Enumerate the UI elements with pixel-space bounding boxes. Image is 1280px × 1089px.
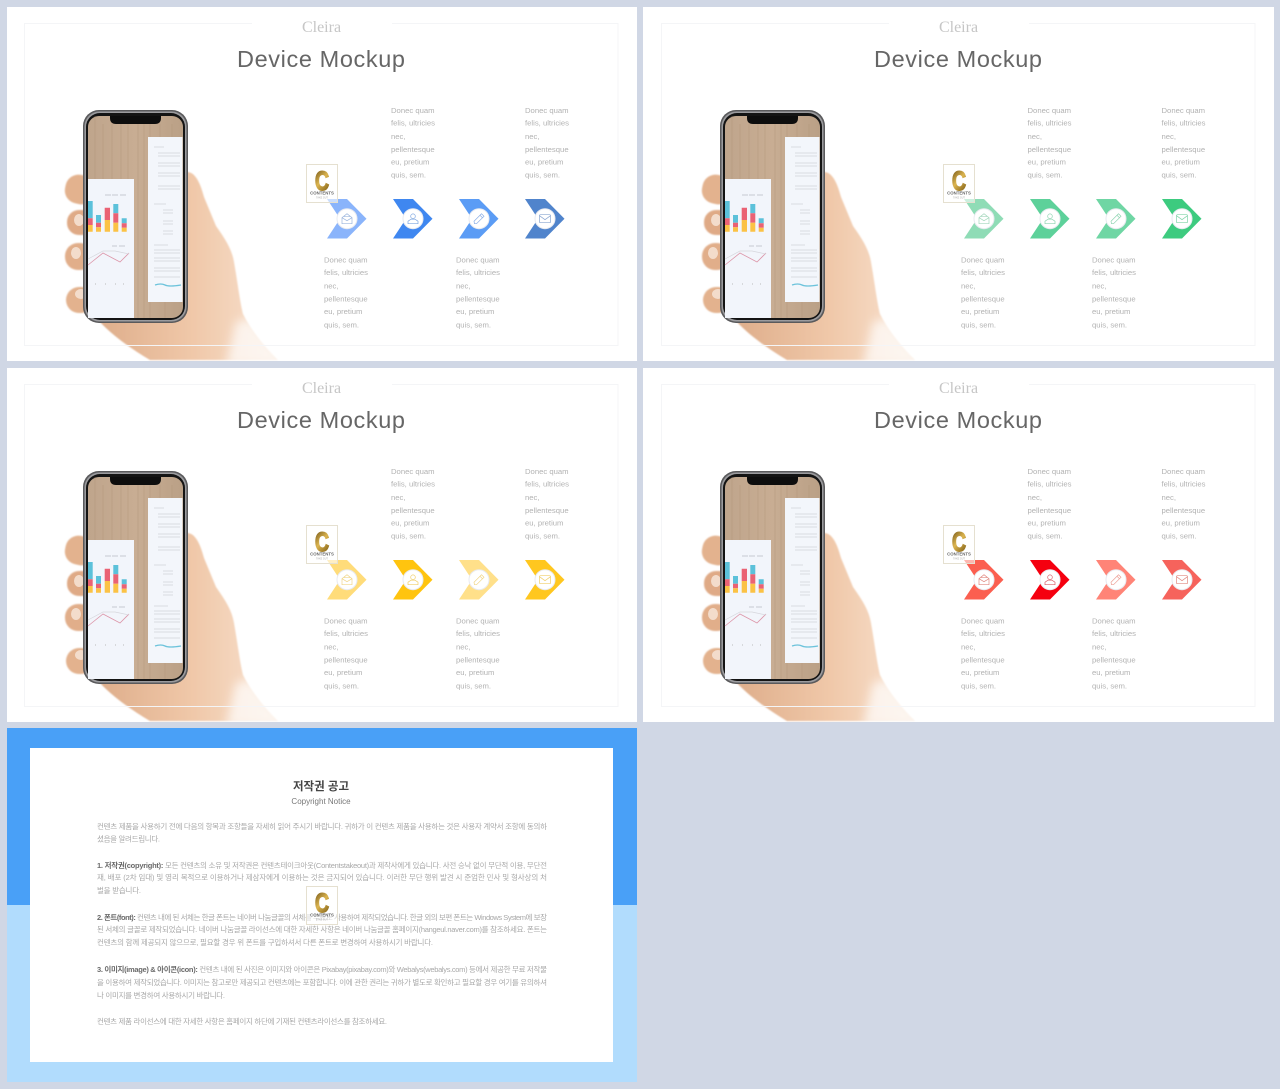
text bottom 1: nec,	[961, 282, 976, 290]
watermark logo: CONTENTS	[947, 190, 971, 196]
text top 1: pellentesque	[1028, 506, 1071, 515]
text top 1: Donec quam	[391, 467, 435, 476]
text top 1: nec,	[1028, 132, 1042, 141]
text top 2: nec,	[1162, 132, 1176, 141]
text top 1: nec,	[1028, 493, 1042, 502]
text bottom 1: eu, pretium	[324, 668, 362, 677]
watermark logo: C	[952, 527, 966, 557]
text bottom 2: felis, ultricies	[456, 268, 500, 277]
text top 2: Donec quam	[1162, 467, 1205, 476]
text bottom 2: nec,	[456, 642, 471, 652]
watermark logo	[306, 164, 338, 202]
title: Device Mockup	[237, 407, 405, 433]
frame	[24, 384, 618, 706]
text bottom 2: felis, ultricies	[456, 629, 500, 638]
text bottom 2: eu, pretium	[456, 307, 494, 316]
slide background	[7, 368, 637, 722]
panel: green slide	[643, 7, 1274, 366]
text bottom 1: quis, sem.	[324, 320, 359, 330]
white card	[30, 748, 613, 1062]
section 1 copyright: 재, 배포 (2차 임대) 및 영리 목적으로 이용하거나 제삼자에게 이용하는 것은 금지되어 있습니다. 이러한 무단 행위 발견 시 준엄한 민사 및 형사상의 처	[97, 872, 547, 882]
slide background	[643, 7, 1274, 361]
watermark logo: C	[952, 166, 966, 196]
text bottom 2: Donec quam	[1092, 256, 1136, 264]
watermark logo: CONTENTS	[310, 190, 334, 196]
text top 2: pellentesque	[525, 506, 569, 515]
text bottom 1: nec,	[961, 642, 976, 652]
watermark logo: TAKE OUT	[316, 918, 328, 922]
closing line: 컨텐츠 제품 라이선스에 대한 자세한 사항은 홈페이지 하단에 기재된 컨텐츠라이선스를 참조하세요.	[97, 1016, 387, 1026]
text top 2: felis, ultricies	[525, 480, 569, 488]
panel: copyright notice	[7, 728, 637, 1082]
section 3 image and icon: 을 이용하여 제작되었습니다. 이미지는 참고로만 제공되고 컨텐츠에는 포함합니다. 이에 관한 권리는 귀하가 별도로 확인하고 필요할 경우 여기를 유의하셔	[97, 977, 547, 987]
section 2 font: 컨텐츠의 함께 제공되지 않으므로, 필요할 경우 위 폰트를 구입하셔서 다른 폰트로 변경하여 사용하시기 바랍니다.	[97, 937, 433, 947]
text top 2: pellentesque	[525, 145, 569, 154]
text top 2: quis, sem.	[1162, 532, 1197, 540]
section 3 image and icon: 나 이미지를 변경하여 사용하시기 바랍니다.	[97, 990, 225, 1000]
text bottom 2: eu, pretium	[456, 668, 494, 677]
text top 1: Donec quam	[1028, 467, 1071, 476]
title: Device Mockup	[874, 407, 1042, 433]
step 1 chevron	[964, 199, 1004, 238]
step 1 chevron	[327, 199, 366, 238]
text bottom 2: eu, pretium	[1092, 668, 1130, 677]
title: Device Mockup	[874, 46, 1042, 72]
text top 2: Donec quam	[1162, 106, 1205, 115]
step 3 chevron	[1096, 560, 1136, 600]
text bottom 2: quis, sem.	[456, 320, 491, 330]
text top 2: eu, pretium	[1162, 518, 1200, 528]
step 2 chevron	[1030, 560, 1070, 600]
text top 1: eu, pretium	[391, 518, 429, 528]
step 2 chevron	[1030, 199, 1070, 238]
text bottom 2: quis, sem.	[456, 682, 491, 690]
text top 1: pellentesque	[391, 145, 435, 154]
text top 2: nec,	[1162, 493, 1176, 502]
text top 2: eu, pretium	[525, 518, 563, 528]
watermark logo	[306, 886, 338, 924]
watermark logo	[944, 526, 974, 564]
text bottom 2: eu, pretium	[1092, 307, 1130, 316]
text top 2: felis, ultricies	[1162, 480, 1206, 488]
text top 1: pellentesque	[1028, 145, 1071, 154]
watermark logo: C	[315, 527, 329, 557]
text bottom 2: pellentesque	[1092, 294, 1136, 304]
step 1 chevron	[327, 560, 366, 600]
text bottom 1: quis, sem.	[961, 320, 996, 330]
text bottom 2: Donec quam	[456, 256, 500, 264]
step 3 chevron	[459, 560, 498, 600]
text top 1: quis, sem.	[1028, 170, 1063, 180]
text bottom 1: eu, pretium	[961, 307, 999, 316]
text top 2: Donec quam	[525, 467, 569, 476]
text top 2: eu, pretium	[525, 158, 563, 166]
text top 2: felis, ultricies	[525, 118, 569, 128]
text bottom 1: Donec quam	[324, 256, 368, 264]
text top 1: felis, ultricies	[391, 480, 435, 488]
phone held in hand	[699, 471, 927, 727]
text bottom 2: Donec quam	[456, 616, 500, 626]
text bottom 1: pellentesque	[961, 294, 1005, 304]
watermark logo	[944, 164, 974, 202]
text bottom 2: pellentesque	[1092, 656, 1136, 664]
phone held in hand	[62, 110, 290, 366]
text top 1: quis, sem.	[391, 532, 426, 540]
text bottom 2: Donec quam	[1092, 616, 1136, 626]
text top 1: Donec quam	[1028, 106, 1071, 115]
frame	[662, 384, 1255, 706]
section 3 image and icon	[97, 964, 547, 1000]
text bottom 1: pellentesque	[324, 294, 368, 304]
step 4 chevron	[525, 199, 564, 238]
title: Device Mockup	[237, 46, 405, 72]
text top 2: quis, sem.	[525, 532, 560, 540]
text bottom 1: felis, ultricies	[961, 268, 1005, 277]
text bottom 1: quis, sem.	[324, 682, 359, 690]
watermark logo: TAKE OUT	[316, 558, 328, 560]
text bottom 1: Donec quam	[961, 256, 1005, 264]
text top 2: felis, ultricies	[1162, 118, 1206, 128]
phone held in hand	[699, 110, 927, 366]
text top 1: nec,	[391, 132, 406, 141]
text top 1: nec,	[391, 493, 406, 502]
step 4 chevron	[1162, 560, 1202, 600]
section 3 image and icon: 3. 이미지(image) & 아이콘(icon): 컨텐츠 내에 된 사진은 이미지와 아이콘은 Pixabay(pixabay.com)와 Webalys(webalys.com) 등에서 제공한 무료 저작물	[97, 964, 547, 974]
brand: Cleira	[939, 380, 978, 397]
intro paragraph: 컨텐츠 제품을 사용하기 전에 다음의 항목과 조항들을 자세히 읽어 주시기 바랍니다. 귀하가 이 컨텐츠 제품을 사용하는 것은 사용자 계약서 조항에 동의하	[97, 821, 547, 831]
text bottom 2: quis, sem.	[1092, 682, 1127, 690]
text bottom 1: nec,	[324, 642, 339, 652]
text top 2: eu, pretium	[1162, 158, 1200, 166]
step 1 chevron	[964, 560, 1004, 600]
watermark logo: CONTENTS	[310, 912, 334, 918]
text bottom 1: felis, ultricies	[324, 629, 368, 638]
text bottom 1: quis, sem.	[961, 682, 996, 690]
slide background	[643, 368, 1274, 722]
text top 2: quis, sem.	[1162, 170, 1197, 180]
text top 1: eu, pretium	[1028, 518, 1066, 528]
section 1 copyright: 벌을 받습니다.	[97, 885, 141, 895]
text top 2: Donec quam	[525, 106, 569, 115]
text top 2: nec,	[525, 493, 540, 502]
brand: Cleira	[939, 19, 978, 36]
text top 2: quis, sem.	[525, 170, 560, 180]
text bottom 2: felis, ultricies	[1092, 629, 1136, 638]
intro paragraph	[97, 821, 547, 844]
step 2 chevron	[393, 199, 432, 238]
text bottom 2: nec,	[1092, 642, 1107, 652]
text top 1: pellentesque	[391, 506, 435, 515]
section 1 copyright	[97, 860, 547, 895]
text top 1: quis, sem.	[1028, 532, 1063, 540]
text top 1: Donec quam	[391, 106, 435, 115]
panel: red slide	[643, 368, 1274, 727]
text top 1: eu, pretium	[1028, 158, 1066, 166]
section 2 font: 된 서체의 글꼴로 제작되었습니다. 네이버 나눔글꼴 라이선스에 대한 자세한 사항은 네이버 나눔글꼴 홈페이지(hangeul.naver.com)를 참조하세요. 폰트는	[97, 924, 547, 934]
text bottom 2: quis, sem.	[1092, 320, 1127, 330]
text top 2: nec,	[525, 132, 540, 141]
watermark logo	[306, 526, 338, 564]
section 2 font	[97, 912, 547, 947]
light blue lower band	[7, 905, 637, 1082]
frame	[662, 24, 1255, 346]
text bottom 1: eu, pretium	[961, 668, 999, 677]
notice subtitle: Copyright Notice	[291, 797, 351, 806]
text bottom 1: Donec quam	[324, 616, 368, 626]
frame	[24, 24, 618, 346]
section 1 copyright: 1. 저작권(copyright): 모든 컨텐츠의 소유 및 저작권은 컨텐츠테이크아웃(Contentstakeout)과 제작사에게 있습니다. 사전 승낙 없이 무단적 이용, 무단전	[97, 860, 547, 870]
text top 2: pellentesque	[1162, 506, 1205, 515]
text bottom 2: felis, ultricies	[1092, 268, 1136, 277]
brand: Cleira	[302, 380, 341, 397]
text top 1: quis, sem.	[391, 170, 426, 180]
text bottom 1: pellentesque	[961, 656, 1005, 664]
text top 1: felis, ultricies	[391, 118, 435, 128]
slide background	[7, 7, 637, 361]
step 3 chevron	[459, 199, 498, 238]
text bottom 2: pellentesque	[456, 656, 500, 664]
text top 2: pellentesque	[1162, 145, 1205, 154]
text top 1: eu, pretium	[391, 158, 429, 166]
watermark logo: C	[315, 888, 329, 918]
watermark logo: TAKE OUT	[953, 196, 965, 200]
text bottom 2: nec,	[1092, 282, 1107, 290]
text bottom 1: eu, pretium	[324, 307, 362, 316]
watermark logo: TAKE OUT	[316, 196, 328, 200]
text bottom 2: pellentesque	[456, 294, 500, 304]
panel: blue slide	[7, 7, 637, 366]
step 2 chevron	[393, 560, 432, 600]
brand: Cleira	[302, 19, 341, 36]
intro paragraph: 셨음을 알려드립니다.	[97, 834, 160, 844]
section 2 font: 2. 폰트(font): 컨텐츠 내에 된 서체는 한글 폰트는 네이버 나눔글꼴의 서체를 무료로 사용하여 제작되었습니다. 한글 외의 보편 폰트는 Windows System에 보장	[97, 912, 547, 922]
watermark logo: CONTENTS	[310, 552, 334, 556]
text bottom 1: Donec quam	[961, 616, 1005, 626]
blue upper band	[7, 728, 637, 905]
step 3 chevron	[1096, 199, 1136, 238]
text top 1: felis, ultricies	[1028, 480, 1072, 488]
notice title: 저작권 공고	[293, 779, 349, 793]
step 4 chevron	[1162, 199, 1202, 238]
text bottom 1: felis, ultricies	[961, 629, 1005, 638]
watermark logo: C	[315, 166, 329, 196]
text bottom 1: pellentesque	[324, 656, 368, 664]
text bottom 1: nec,	[324, 282, 339, 290]
phone held in hand	[62, 471, 290, 727]
watermark logo: CONTENTS	[947, 552, 971, 556]
watermark logo: TAKE OUT	[953, 558, 965, 560]
step 4 chevron	[525, 560, 564, 600]
panel: yellow slide	[7, 368, 637, 727]
text top 1: felis, ultricies	[1028, 118, 1072, 128]
text bottom 2: nec,	[456, 282, 471, 290]
text bottom 1: felis, ultricies	[324, 268, 368, 277]
